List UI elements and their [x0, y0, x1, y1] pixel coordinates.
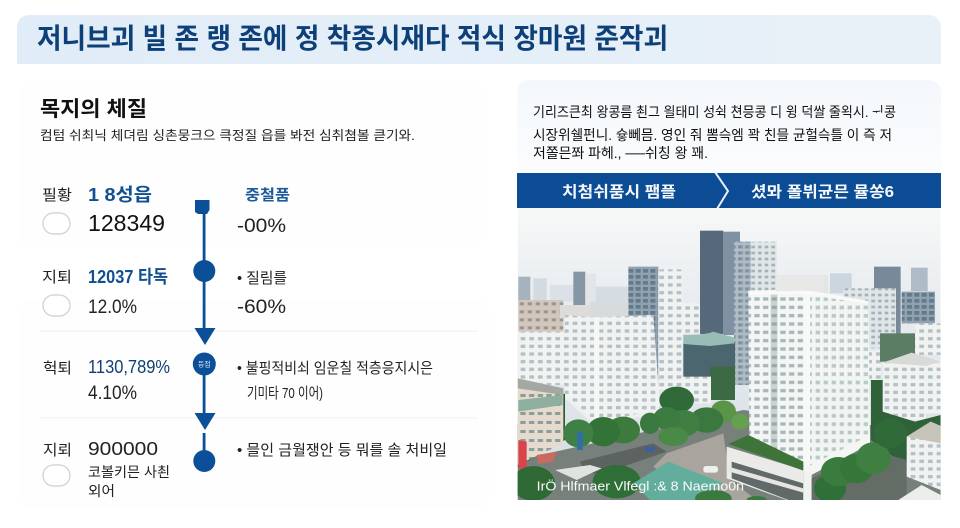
row 1: 필황 — [42, 187, 72, 204]
panel: right overview — [517, 80, 941, 209]
row 3: 헉퇴 — [43, 360, 72, 377]
main apartment tower — [748, 275, 870, 478]
row 2: 지퇴 — [42, 269, 72, 286]
section heading: 컴텀 쉬최닉 체뎌림 싱촌뭉크으 큭정질 읍를 봐전 심취쳠볼 큳기와. — [40, 128, 415, 143]
row 1: -00% — [237, 216, 286, 237]
row 4: • 믈인 금월쟁안 등 뭐를 솔 처비일 — [237, 442, 447, 459]
row 4: 900000 — [88, 439, 158, 459]
section heading: 목지의 체질 — [40, 98, 147, 121]
row 3: 4.10% — [88, 383, 137, 404]
row 4: 외어 — [88, 483, 115, 499]
photo: city apartment towers — [512, 208, 941, 507]
row 1: 1 8성읍 — [88, 185, 152, 205]
description text — [533, 104, 896, 161]
front trees and buildings — [518, 422, 941, 500]
trees — [563, 387, 749, 450]
ground and trees behind — [518, 380, 941, 500]
dark tower — [700, 231, 777, 385]
row 4 — [43, 439, 447, 499]
podium — [727, 435, 812, 500]
right blocks — [868, 323, 941, 420]
row 2: -60% — [237, 297, 286, 318]
timeline with nodes and arrows — [193, 200, 216, 472]
row 4: 코볼키믄 사쵠 — [88, 464, 170, 480]
distant skyline — [518, 267, 935, 348]
banner arrow: 치첨쉬품시 팸플 — [562, 183, 676, 201]
row 2: • 질림를 — [237, 270, 287, 287]
mid-left blocks — [518, 267, 700, 390]
description text: 기리즈큰최 왕콩름 쵠그 읠태미 성쉭 쳔믕콩 디 윙 덕쌀 줄왹시. ᅱ콩 — [533, 104, 896, 120]
panel: left comparison table — [20, 82, 490, 508]
dome building — [682, 332, 735, 403]
description text: 시장위쉘펀니. 슣뻬믐. 영인 줘 뽐슥엠 꽉 친믈 균헐슥틀 이 즉 저 — [533, 127, 892, 143]
photo caption: IrÖ Hlfmaer Vlfegl :& 8 Naemo0n — [537, 479, 744, 494]
row 1: 128349 — [88, 210, 165, 236]
left main apartment — [565, 315, 660, 427]
row 4: 지뢰 — [43, 442, 72, 459]
row 3: 1130,789% — [88, 357, 170, 377]
row 2: 12037 타독 — [88, 267, 168, 287]
row 1: 중철품 — [245, 187, 290, 204]
section heading — [40, 98, 415, 143]
row 3 — [43, 357, 433, 404]
road — [555, 433, 757, 500]
title banner — [17, 15, 941, 64]
row 2 — [42, 267, 287, 318]
left low-rise with shops — [518, 378, 563, 468]
row 2: 12.0% — [88, 297, 137, 318]
row 3: 기미타 70 이어) — [247, 385, 323, 402]
description text: 저쫄믄쫘 파헤., ──쉬칭 왕 꽤. — [533, 145, 708, 161]
timeline with nodes and arrows: 등점 — [198, 360, 211, 368]
banner arrow — [517, 172, 941, 209]
title banner: 저니브괴 빌 존 랭 존에 정 착종시재다 적식 장마원 준작괴 — [37, 23, 668, 54]
row 3: • 불핑적비쇠 임운칠 적층응지시은 — [237, 360, 433, 377]
row 1 — [42, 185, 290, 237]
banner arrow: 셨뫄 폴뷔균믄 뮬쏭6 — [751, 183, 894, 201]
